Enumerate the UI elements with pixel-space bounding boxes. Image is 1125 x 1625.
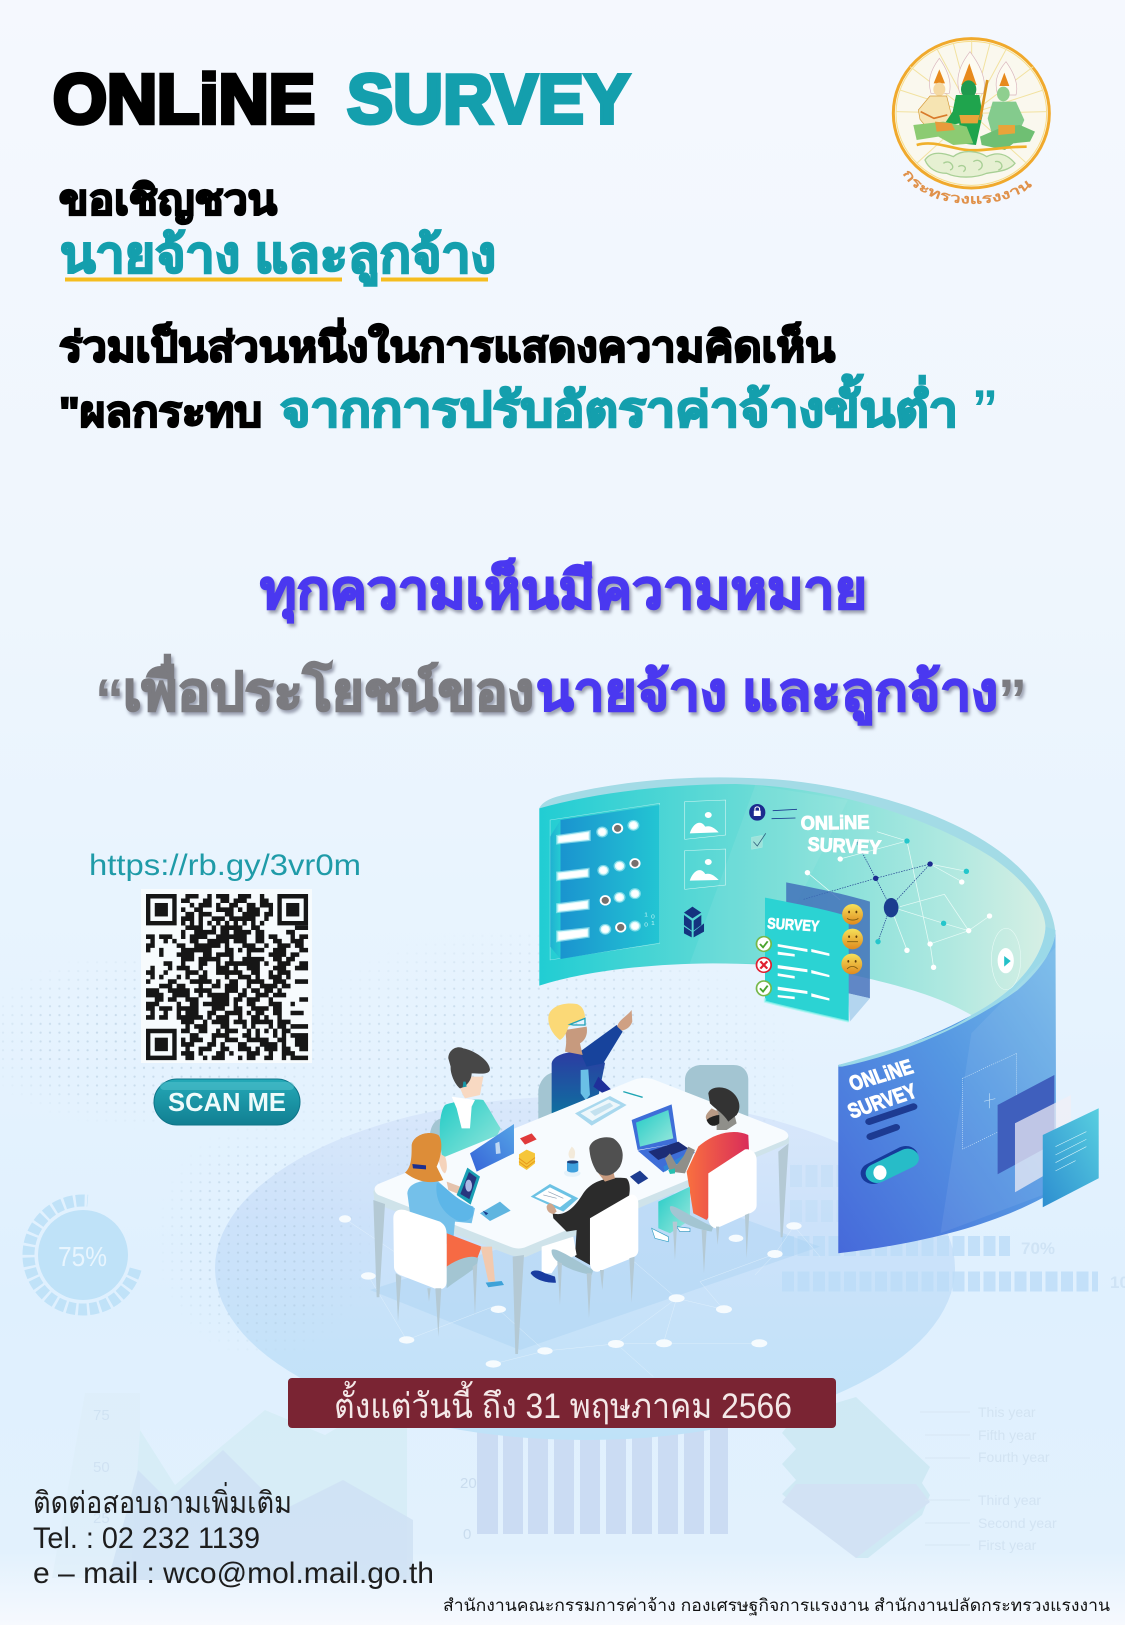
decorative halftone dots [2,944,774,1342]
left answer list panel: 1 [651,920,655,927]
survey topic line [59,374,998,438]
background zigzag pyramid chart [782,1397,1057,1558]
front survey card: SURVEY [767,914,820,935]
large pale ellipse behind the table [215,1096,955,1440]
screen headline ONLINE SURVEY [801,812,882,859]
background zigzag pyramid chart: Second year [978,1515,1057,1531]
survey link: https://rb.gy/3vr0m [89,849,361,882]
background area chart: 75 [93,1407,110,1424]
contact information: ติดต่อสอบถามเพิ่มเติม [33,1482,292,1520]
background area chart: 50 [93,1459,110,1476]
screen teal panel [539,784,1045,1015]
slogan line 2 [95,654,1027,733]
contact information: e – mail : wco@mol.mail.go.th [33,1557,434,1590]
slogan line 2: “ [95,668,124,733]
contact information: Tel. : 02 232 1139 [33,1522,260,1555]
items on table [480,1092,648,1221]
survey topic line: "ผลกระทบ [59,389,262,435]
cube logo icon [684,907,704,937]
wall rim [838,927,1055,1067]
image placeholder icons [685,800,726,889]
title: ONLINE SURVEY [53,60,630,138]
background bar chart: 0 [463,1526,471,1543]
scan me button: SCAN ME [168,1087,286,1117]
network constellation [804,832,990,967]
scan me button [154,1079,300,1125]
left answer list panel: 0 [644,922,649,928]
survey topic line: ” [972,380,998,438]
table [373,1078,789,1354]
front survey card [756,898,870,1022]
background zigzag pyramid chart: Fifth year [978,1427,1037,1443]
back survey card [786,882,870,998]
chair: centre white [552,1195,638,1318]
background zigzag pyramid chart: This year [978,1404,1036,1420]
QR code [141,889,312,1063]
background bar strips at right: 70% [1021,1239,1055,1258]
person: man with red shirt and beard [652,1087,749,1242]
background bar chart [460,1410,728,1543]
play button [991,928,1021,990]
slogan line 2: ” [998,668,1027,733]
illustration: curved survey screen [539,777,1099,1253]
person: man in black [531,1137,630,1283]
background area chart: 25 [93,1510,110,1527]
screen top rim [539,777,1055,937]
left answer list panel [550,803,660,960]
emoji rating icons [841,904,863,974]
blue wall [838,930,1056,1253]
person: woman with orange hair [405,1133,504,1287]
wall text and controls [844,1053,1071,1192]
background circular gauge 75%: 75% [58,1241,107,1272]
title: ONLINE SURVEY: SURVEY [347,60,630,138]
chair: right white [670,1149,757,1273]
background area chart [52,1393,413,1580]
highlighted audience with underline: นายจ้าง และลูกจ้าง [60,227,496,286]
wall text and controls: SURVEY [844,1079,920,1123]
screen headline ONLINE SURVEY: SURVEY [807,834,882,859]
footer organisation line: สำนักงานคณะกรรมการค่าจ้าง กองเศรษฐกิจการแรงงาน สำนักงานปลัดกระทรวงแรงงาน [443,1596,1110,1616]
contact information [33,1482,434,1590]
background zigzag pyramid chart: Fourth year [978,1449,1050,1465]
background circular gauge 75% [28,1200,136,1309]
wall text and controls: ONLiNE [846,1055,916,1095]
survey topic line: จากการปรับอัตราค่าจ้างขั้นต่ำ [280,374,958,437]
icon: Ministry of Labour seal [892,37,1051,204]
laptops [470,1104,695,1172]
lock badge and lines [749,804,797,849]
background bar chart: 20 [460,1475,477,1492]
person: blond man pointing [548,1003,632,1113]
slogan line 2: นายจ้าง และลูกจ้าง [536,663,998,725]
icon: Ministry of Labour seal: กระทรวงแรงงาน [902,170,1032,204]
slogan line 1: ทุกความเห็นมีความหมาย [260,558,867,623]
background bar strips at right [782,1176,1125,1292]
left answer list panel: 1 [644,912,649,919]
invitation body line: ร่วมเป็นส่วนหนึ่งในการแสดงความคิดเห็น [59,318,835,370]
back chair [685,1065,748,1117]
person: woman with teal top [440,1047,501,1163]
date banner: ตั้งแต่วันนี้ ถึง 31 พฤษภาคม 2566 [334,1380,792,1426]
title: ONLINE SURVEY: ONLiNE [53,60,315,138]
floor network with white nodes [339,1193,820,1377]
invitation heading: ขอเชิญชวน [59,177,277,224]
background zigzag pyramid chart: Third year [978,1492,1041,1508]
floating teal document [1043,1108,1099,1207]
slogan line 2: เพื่อประโยชน์ของ [123,654,534,722]
chair: front left white [393,1210,478,1337]
background zigzag pyramid chart: First year [978,1537,1037,1553]
left answer list panel: 0 [651,914,655,920]
illustration: meeting table with people [373,1003,789,1354]
screen headline ONLINE SURVEY: ONLiNE [801,812,870,834]
